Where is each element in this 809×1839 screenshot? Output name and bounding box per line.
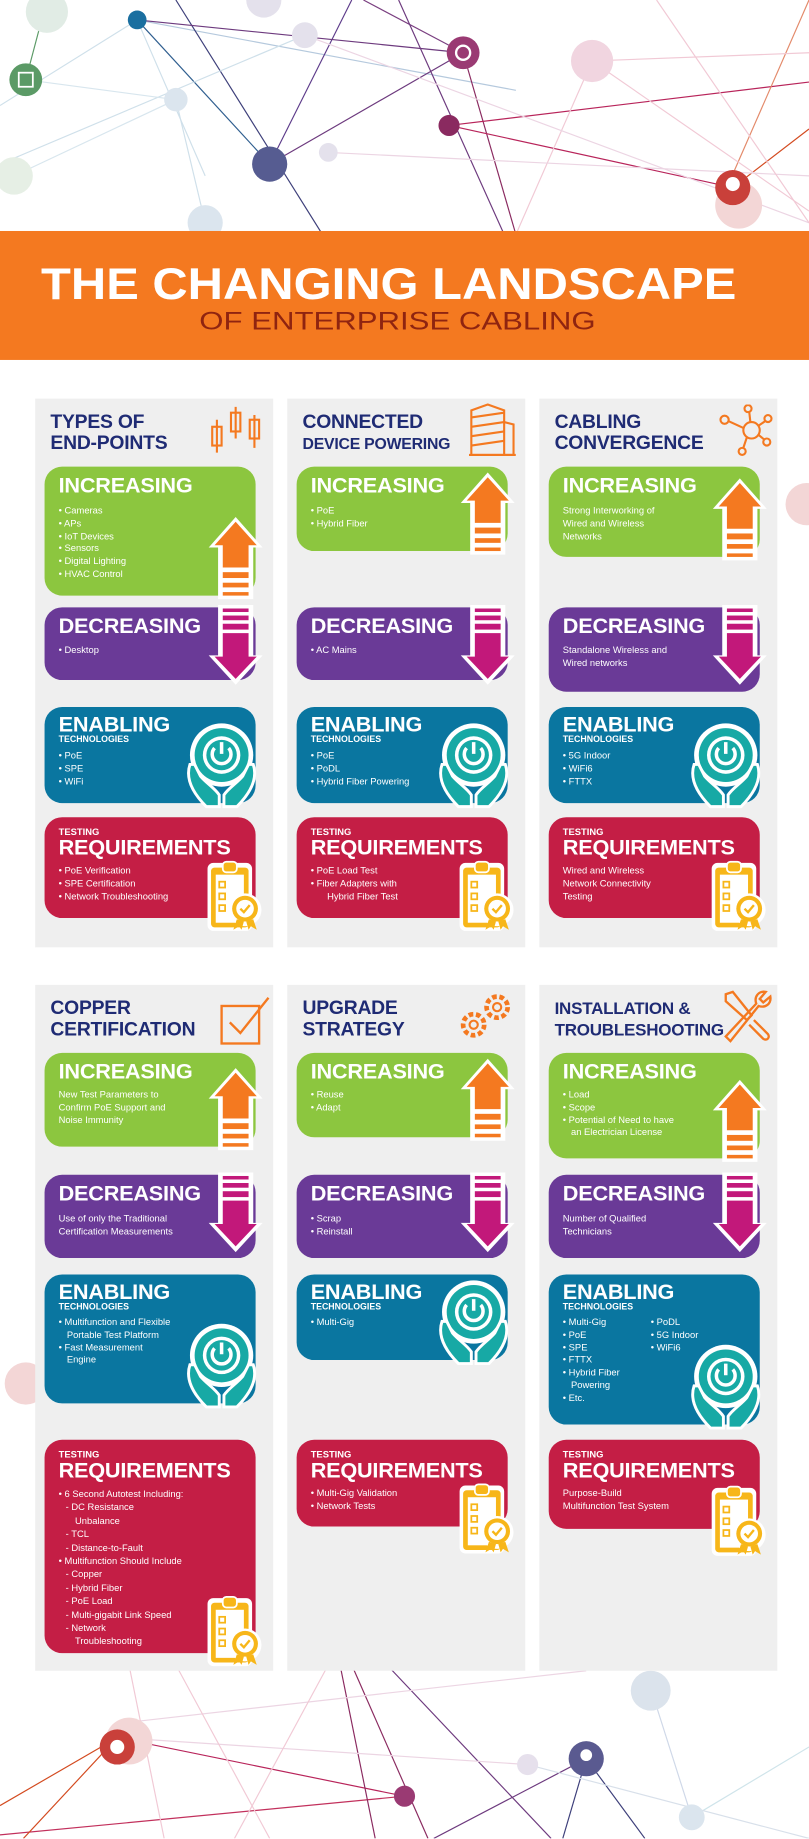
box: decreasing bbox=[549, 607, 760, 692]
box: testing requirements: PoE Load Test bbox=[317, 865, 377, 876]
box: enabling: Multifunction and Flexible bbox=[65, 1317, 170, 1327]
panel: installation & troubleshooting bbox=[539, 985, 777, 1671]
box: testing requirements: Distance-to-Fault bbox=[71, 1543, 143, 1553]
title banner bbox=[0, 231, 809, 360]
box: enabling bbox=[45, 707, 256, 803]
box: enabling: PoDL bbox=[657, 1317, 680, 1327]
box: enabling: TECHNOLOGIES bbox=[311, 734, 381, 745]
panel: copper certification bbox=[35, 985, 273, 1671]
box: decreasing bbox=[549, 1175, 760, 1258]
box: enabling: SPE bbox=[65, 763, 83, 774]
box: enabling: TECHNOLOGIES bbox=[311, 1301, 381, 1312]
box: decreasing: DECREASING bbox=[59, 1181, 201, 1205]
box: enabling: 5G Indoor bbox=[569, 750, 610, 761]
box: testing requirements: Troubleshooting bbox=[75, 1636, 142, 1647]
heading: END-POINTS bbox=[50, 433, 167, 454]
box: testing requirements: PoE Load bbox=[71, 1596, 113, 1607]
box: increasing: IoT Devices bbox=[65, 531, 114, 541]
heading: TROUBLESHOOTING bbox=[555, 1021, 724, 1040]
box: decreasing bbox=[297, 1175, 508, 1258]
title: THE CHANGING LANDSCAPE bbox=[41, 260, 736, 309]
box: increasing: INCREASING bbox=[59, 1059, 192, 1083]
heading bbox=[554, 1000, 724, 1040]
heading: DEVICE POWERING bbox=[302, 435, 450, 453]
box: testing requirements: TESTING bbox=[59, 1449, 99, 1460]
box: enabling: Multi-Gig bbox=[317, 1317, 354, 1327]
box: decreasing: Number of Qualified bbox=[563, 1213, 646, 1224]
box: testing requirements: Unbalance bbox=[75, 1516, 120, 1526]
box: enabling: TECHNOLOGIES bbox=[59, 734, 129, 745]
box: enabling: Hybrid Fiber Powering bbox=[317, 776, 409, 786]
box: decreasing: DECREASING bbox=[563, 1181, 705, 1205]
box: enabling: Multi-Gig bbox=[569, 1317, 606, 1327]
heading: COPPER bbox=[50, 998, 131, 1019]
heading bbox=[50, 412, 167, 454]
box: enabling: ENABLING bbox=[59, 1279, 170, 1304]
box: increasing: Potential of Need to have bbox=[569, 1115, 674, 1125]
box: increasing bbox=[549, 1053, 760, 1158]
icon: candlestick bbox=[211, 406, 260, 453]
box: enabling: ENABLING bbox=[563, 1279, 674, 1304]
box: decreasing: DECREASING bbox=[311, 613, 453, 638]
box: testing requirements: Fiber Adapters with bbox=[317, 878, 397, 888]
box: testing requirements: DC Resistance bbox=[71, 1502, 134, 1513]
box: enabling: Hybrid Fiber bbox=[569, 1367, 620, 1378]
box: testing requirements bbox=[45, 817, 256, 918]
box: enabling bbox=[549, 707, 760, 803]
box: testing requirements: Multifunction Should Include bbox=[65, 1556, 182, 1566]
box: enabling: TECHNOLOGIES bbox=[563, 1301, 633, 1312]
box: increasing bbox=[549, 467, 760, 557]
icon: network hub bbox=[719, 404, 772, 456]
heading: UPGRADE bbox=[302, 998, 398, 1019]
box: testing requirements: TESTING bbox=[59, 827, 99, 837]
box: enabling: ENABLING bbox=[563, 712, 674, 736]
box: enabling: WiFi bbox=[65, 776, 83, 786]
box: testing requirements bbox=[297, 817, 508, 918]
heading: TYPES OF bbox=[50, 412, 144, 433]
subtitle: OF ENTERPRISE CABLING bbox=[199, 308, 596, 335]
side decorative circles bbox=[4, 483, 809, 1405]
box: enabling: WiFi6 bbox=[657, 1342, 681, 1353]
box: decreasing: Use of only the Traditional bbox=[59, 1213, 167, 1224]
box: decreasing: DECREASING bbox=[311, 1181, 453, 1205]
box: increasing: Noise Immunity bbox=[59, 1115, 123, 1125]
box: enabling bbox=[297, 1274, 508, 1360]
box: testing requirements: REQUIREMENTS bbox=[59, 835, 231, 859]
box: decreasing bbox=[297, 607, 508, 680]
box: testing requirements: REQUIREMENTS bbox=[563, 835, 735, 859]
box: testing requirements: 6 Second Autotest Including: bbox=[65, 1489, 183, 1500]
box: testing requirements bbox=[549, 817, 760, 918]
panel: upgrade strategy bbox=[287, 985, 525, 1671]
box: increasing: INCREASING bbox=[311, 473, 445, 497]
box: enabling: PoDL bbox=[317, 763, 340, 774]
icon: building bbox=[469, 403, 516, 456]
box: decreasing: Desktop bbox=[65, 645, 99, 655]
box: increasing: New Test Parameters to bbox=[59, 1089, 159, 1100]
heading: INSTALLATION & bbox=[555, 1000, 690, 1019]
box: decreasing: DECREASING bbox=[563, 613, 705, 638]
heading: CONNECTED bbox=[302, 412, 423, 433]
box: increasing: Wired and Wireless bbox=[563, 518, 644, 529]
box: testing requirements: REQUIREMENTS bbox=[311, 1457, 483, 1482]
box: decreasing: Scrap bbox=[317, 1213, 341, 1224]
box: testing requirements: Hybrid Fiber Test bbox=[327, 891, 398, 901]
box: testing requirements: SPE Certification bbox=[65, 878, 135, 888]
box: testing requirements: Network Connectivity bbox=[563, 878, 651, 888]
box: enabling: FTTX bbox=[569, 1355, 592, 1365]
box: increasing: Reuse bbox=[317, 1089, 344, 1100]
box: decreasing: AC Mains bbox=[316, 645, 357, 655]
box: enabling: ENABLING bbox=[311, 712, 422, 736]
box: testing requirements: Network Tests bbox=[317, 1501, 375, 1511]
box: increasing: Load bbox=[569, 1089, 590, 1100]
box: testing requirements: PoE Verification bbox=[65, 865, 131, 876]
box: increasing: INCREASING bbox=[563, 1059, 697, 1083]
box: testing requirements: Multifunction Test System bbox=[563, 1501, 669, 1511]
box: testing requirements bbox=[297, 1440, 508, 1527]
box: testing requirements: TESTING bbox=[311, 1449, 351, 1460]
box: increasing: Strong Interworking of bbox=[563, 505, 655, 516]
box: increasing bbox=[297, 1053, 508, 1137]
panel: connected device powering bbox=[287, 399, 525, 947]
box: enabling: SPE bbox=[569, 1342, 587, 1353]
box: increasing: Adapt bbox=[316, 1102, 341, 1112]
box: testing requirements bbox=[549, 1440, 760, 1529]
box: enabling: 5G Indoor bbox=[657, 1329, 698, 1340]
panel: types of end-points bbox=[35, 399, 273, 947]
box: enabling: FTTX bbox=[569, 776, 592, 786]
box: enabling: Portable Test Platform bbox=[67, 1329, 159, 1340]
box: decreasing: Technicians bbox=[563, 1226, 612, 1237]
box: increasing: Confirm PoE Support and bbox=[59, 1102, 166, 1112]
box: testing requirements: Purpose-Build bbox=[563, 1488, 622, 1498]
box: testing requirements: TESTING bbox=[563, 827, 603, 837]
box: enabling: PoE bbox=[317, 750, 334, 761]
box: testing requirements: Hybrid Fiber bbox=[71, 1583, 122, 1593]
background network top bbox=[0, 0, 809, 231]
box: decreasing: Reinstall bbox=[317, 1226, 353, 1237]
box: enabling: ENABLING bbox=[59, 712, 170, 736]
heading bbox=[50, 998, 195, 1040]
box: increasing: INCREASING bbox=[563, 473, 697, 497]
box: increasing: INCREASING bbox=[311, 1059, 445, 1083]
heading: CONVERGENCE bbox=[555, 433, 704, 454]
box: increasing: HVAC Control bbox=[65, 569, 123, 579]
icon: checkbox bbox=[220, 997, 270, 1045]
box: enabling: Powering bbox=[571, 1380, 610, 1391]
box: increasing: INCREASING bbox=[59, 473, 192, 497]
box: enabling: TECHNOLOGIES bbox=[59, 1301, 129, 1312]
box: increasing: Digital Lighting bbox=[65, 556, 126, 567]
box: decreasing bbox=[45, 1175, 256, 1258]
background network bottom bbox=[0, 1670, 809, 1838]
box: testing requirements: Testing bbox=[563, 891, 593, 901]
box: testing requirements: Network Troubleshooting bbox=[65, 891, 168, 901]
panel: cabling convergence bbox=[539, 399, 777, 947]
heading: CABLING bbox=[555, 412, 641, 433]
box: increasing bbox=[45, 1053, 256, 1147]
box: testing requirements: REQUIREMENTS bbox=[563, 1457, 735, 1482]
box: testing requirements: Network bbox=[71, 1623, 106, 1633]
box: decreasing: Certification Measurements bbox=[59, 1226, 173, 1237]
box: testing requirements: Multi-Gig Validation bbox=[317, 1488, 397, 1498]
box: increasing: an Electrician License bbox=[571, 1127, 662, 1138]
box: testing requirements: Copper bbox=[71, 1569, 102, 1580]
box: enabling bbox=[45, 1274, 256, 1403]
box: increasing bbox=[297, 467, 508, 551]
box: enabling bbox=[297, 707, 508, 803]
box: increasing: Sensors bbox=[65, 543, 99, 554]
box: increasing: Scope bbox=[569, 1102, 595, 1112]
box: enabling bbox=[549, 1274, 760, 1425]
icon: bottom nodes bbox=[100, 1729, 604, 1807]
box: increasing: Networks bbox=[563, 531, 602, 541]
box: decreasing: DECREASING bbox=[59, 613, 201, 638]
box: testing requirements: TCL bbox=[71, 1529, 89, 1540]
box: increasing bbox=[45, 467, 256, 596]
icon: network nodes bbox=[9, 11, 750, 205]
box: increasing: APs bbox=[64, 518, 81, 529]
icon: gears bbox=[460, 994, 510, 1038]
box: decreasing: Standalone Wireless and bbox=[563, 645, 667, 655]
box: increasing: Cameras bbox=[65, 505, 103, 516]
box: enabling: Etc. bbox=[569, 1393, 585, 1403]
box: enabling: ENABLING bbox=[311, 1279, 422, 1304]
box: testing requirements bbox=[45, 1440, 256, 1653]
box: testing requirements: TESTING bbox=[311, 827, 351, 837]
heading: CERTIFICATION bbox=[50, 1019, 195, 1040]
box: testing requirements: TESTING bbox=[563, 1449, 603, 1460]
box: enabling: TECHNOLOGIES bbox=[563, 734, 633, 745]
icon: tools bbox=[724, 990, 772, 1043]
heading: STRATEGY bbox=[302, 1019, 405, 1040]
box: testing requirements: Multi-gigabit Link Speed bbox=[71, 1609, 172, 1620]
box: testing requirements: REQUIREMENTS bbox=[59, 1457, 231, 1482]
box: decreasing: Wired networks bbox=[563, 658, 627, 668]
box: enabling: PoE bbox=[569, 1329, 586, 1340]
box: enabling: PoE bbox=[65, 750, 82, 761]
heading bbox=[302, 998, 405, 1040]
box: testing requirements: Wired and Wireless bbox=[563, 865, 644, 876]
heading bbox=[302, 412, 450, 453]
box: increasing: Hybrid Fiber bbox=[317, 518, 368, 529]
box: decreasing bbox=[45, 607, 256, 680]
box: increasing: PoE bbox=[317, 505, 334, 516]
box: testing requirements: REQUIREMENTS bbox=[311, 835, 483, 859]
box: enabling: Fast Measurement bbox=[65, 1342, 143, 1353]
box: enabling: Engine bbox=[67, 1355, 96, 1365]
box: enabling: WiFi6 bbox=[569, 763, 593, 774]
heading bbox=[555, 412, 704, 454]
